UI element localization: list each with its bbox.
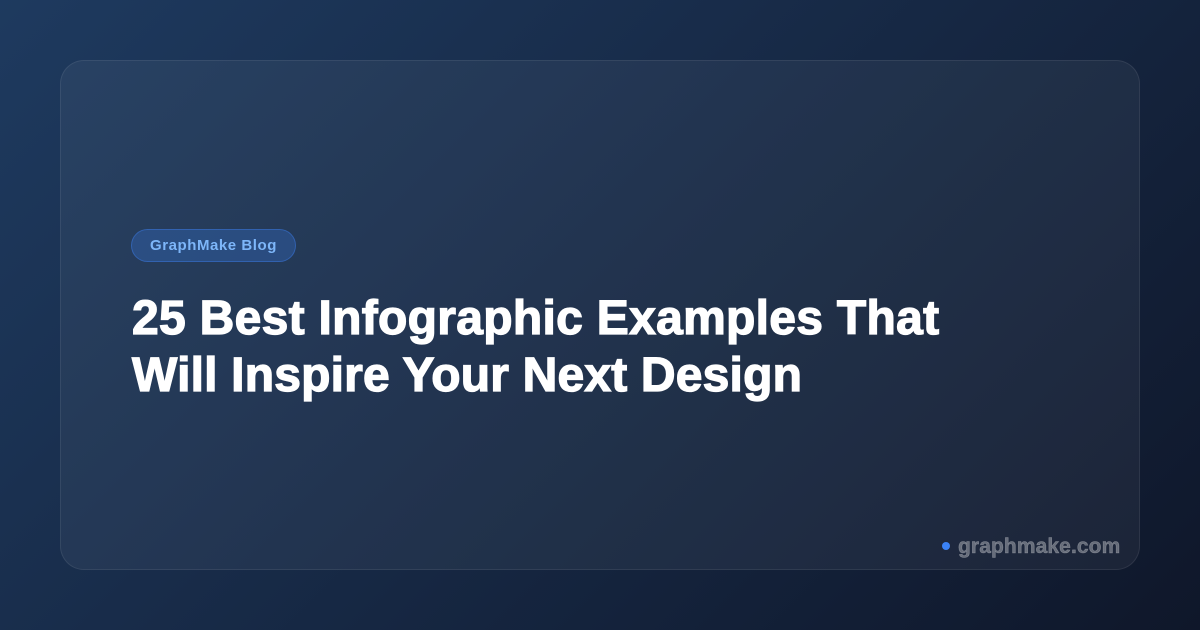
- title: Will Inspire Your Next Design: [132, 349, 802, 402]
- badge: GraphMake Blog: GraphMake Blog: [150, 237, 277, 254]
- panel: glass card: [60, 60, 1140, 570]
- title: 25 Best Infographic Examples That: [132, 292, 939, 345]
- icon: blue dot: [942, 542, 950, 550]
- website label: graphmake.com: [958, 535, 1120, 558]
- brand footer: graphmake.com: [942, 535, 1120, 558]
- badge: GraphMake Blog: [131, 229, 296, 262]
- title: [131, 292, 940, 402]
